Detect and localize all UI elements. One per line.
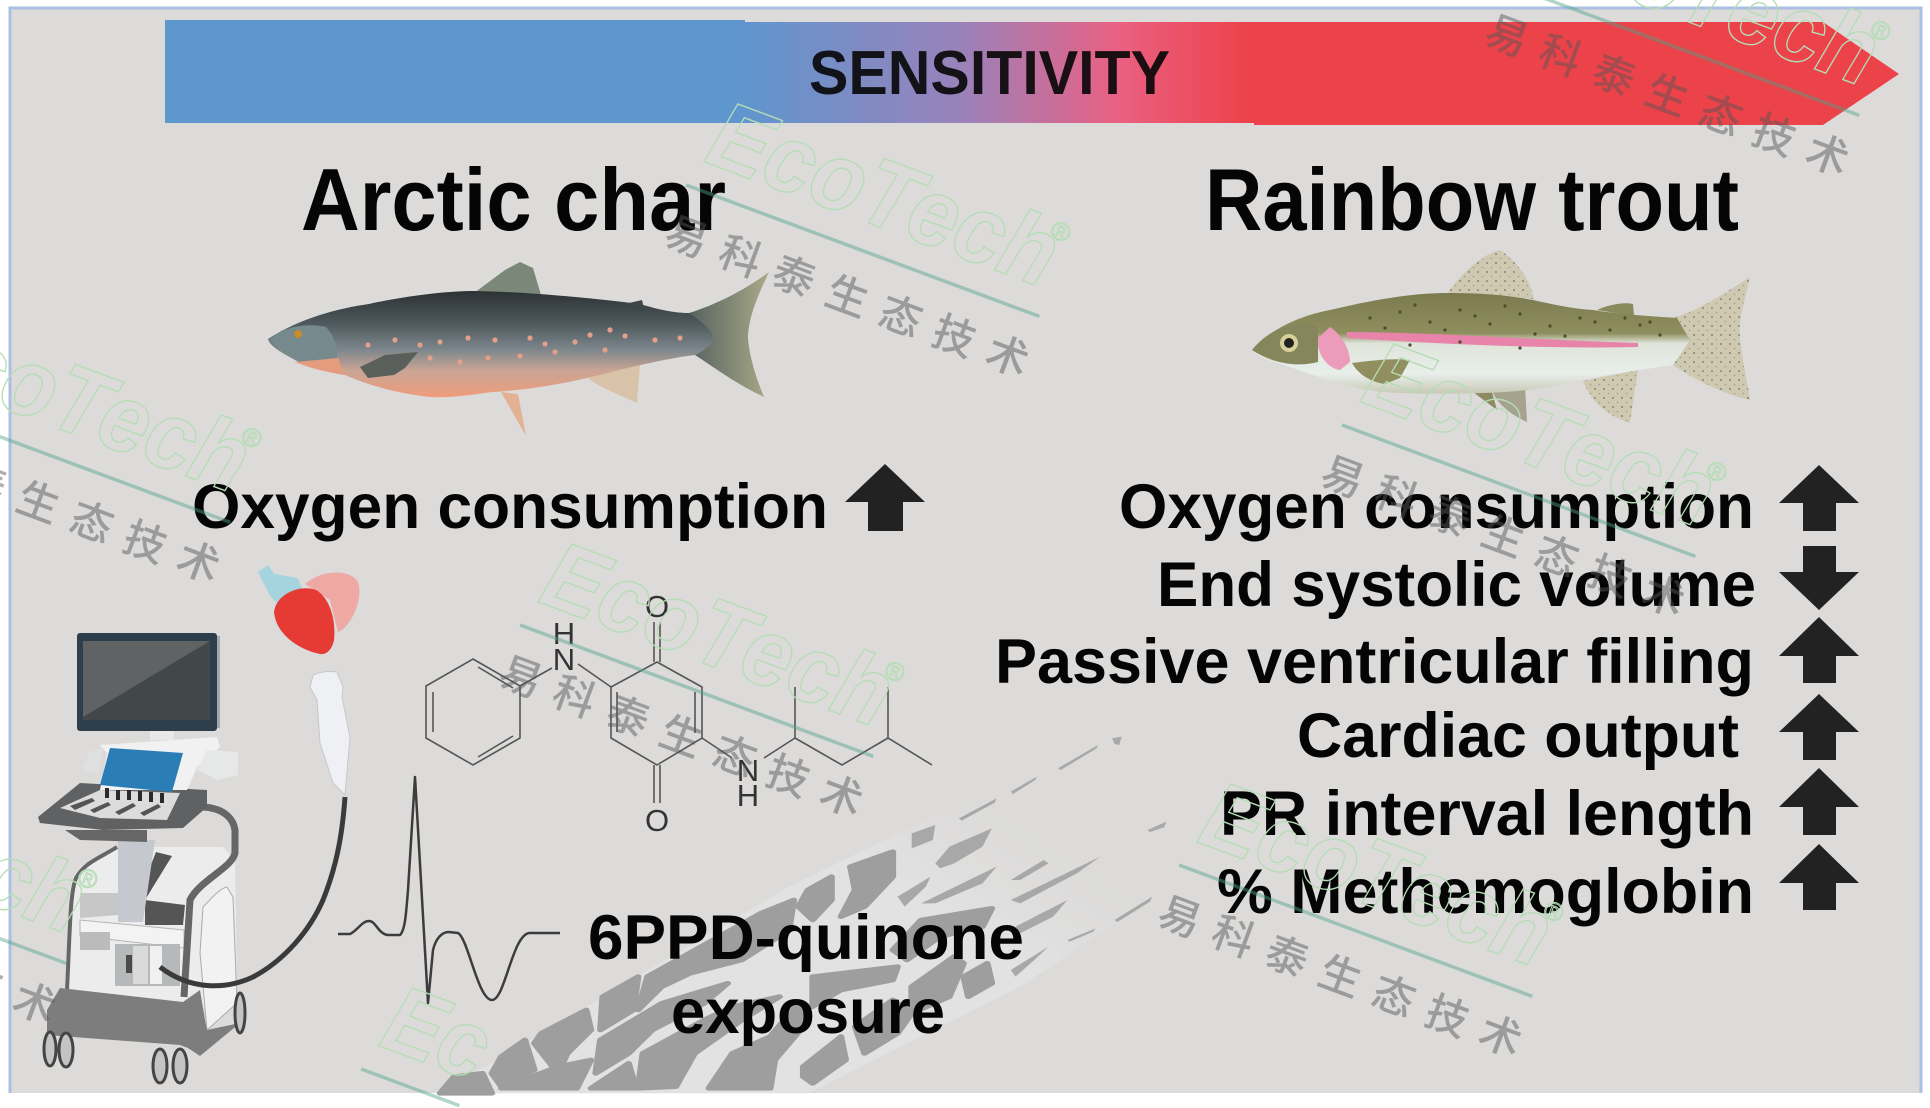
- atom labels: O: [645, 589, 669, 624]
- atom labels: N: [553, 642, 575, 677]
- label: 6PPD-quinone exposure: 6PPD-quinone: [588, 903, 1024, 973]
- front strip: [80, 920, 184, 948]
- watermark: top right: 易科泰生态技术: [1479, 7, 1869, 190]
- cart body: [65, 807, 237, 1030]
- watermark: right middle: 易科泰生态技术: [1315, 448, 1705, 631]
- watermark: center: ®: [881, 654, 909, 689]
- label: Oxygen consumption, Rainbow trout: Oxygen consumption: [1119, 472, 1754, 542]
- atom labels: O: [645, 803, 669, 838]
- arrow: up, trout oxygen consumption: [1779, 465, 1859, 531]
- watermark: right middle: EcoTech: [1351, 321, 1729, 548]
- watermark: center top: EcoTech: [695, 81, 1073, 308]
- icon: heart: [258, 565, 359, 654]
- arrow: up, passive ventricular filling: [1779, 617, 1859, 683]
- watermark: center top: [659, 77, 1098, 391]
- arrow: up, PR interval length: [1779, 768, 1859, 835]
- label: Oxygen consumption, Arctic char: Oxygen consumption: [192, 472, 828, 542]
- arrow: down, end systolic volume: [1779, 546, 1859, 610]
- chemical structure: 6PPD-quinone: [426, 589, 932, 838]
- atom labels: [553, 589, 759, 838]
- wheels: [44, 993, 245, 1083]
- watermark: lower right: EcoTech: [1188, 761, 1566, 988]
- watermark: left middle: ®: [238, 420, 266, 455]
- touch console: [82, 737, 238, 803]
- watermark: right middle: ®: [1703, 454, 1731, 489]
- heading: sensitivity: SENSITIVITY: [809, 39, 1170, 108]
- watermark: right middle: [1315, 317, 1754, 631]
- white side panel: [200, 887, 237, 1030]
- console knobs: [105, 788, 164, 803]
- watermark: center: 易科泰生态技术: [493, 648, 883, 831]
- icon: ultrasound machine: [38, 633, 245, 1083]
- label: Cardiac output: Cardiac output: [1297, 701, 1739, 771]
- atom labels: H: [737, 778, 759, 813]
- atom labels: N: [737, 753, 759, 788]
- atom labels: H: [553, 616, 575, 651]
- heading: Arctic char: Arctic char: [301, 150, 726, 249]
- module bay: [115, 944, 180, 986]
- chart: ECG trace: [338, 777, 560, 1003]
- watermark: center: EcoTech: [529, 521, 907, 748]
- label: 6PPD-quinone exposure: [588, 903, 1024, 1047]
- trout speckles: [1368, 303, 1662, 350]
- monitor: [77, 633, 220, 740]
- heading: Rainbow trout: Rainbow trout: [1205, 150, 1739, 249]
- watermark: center top: 易科泰生态技术: [659, 208, 1049, 391]
- label: Passive ventricular filling: Passive ventricular filling: [995, 627, 1754, 697]
- watermark: center top: ®: [1047, 214, 1075, 249]
- pedestal: [118, 840, 155, 922]
- icon: Arctic char fish: [268, 262, 769, 436]
- watermark: bottom center: Ec: [370, 965, 505, 1101]
- label: End systolic volume: End systolic volume: [1157, 550, 1756, 620]
- watermark: lower right: 易科泰生态技术: [1152, 888, 1542, 1071]
- thin fading tread streaks: [898, 737, 1166, 977]
- sensitivity gradient arrow: [165, 20, 1899, 125]
- icon: Rainbow trout fish: [1252, 250, 1750, 423]
- watermark: center: [493, 517, 932, 831]
- Arctic char spots: [365, 327, 683, 365]
- icon: ultrasound probe and cable: [160, 671, 350, 986]
- watermark: lower left: ®: [74, 861, 102, 896]
- rear compartment: [80, 893, 118, 918]
- watermark: top right: ®: [1867, 13, 1895, 48]
- arrow: up, methemoglobin: [1779, 844, 1859, 910]
- tread blocks: [440, 852, 992, 1093]
- label: PR interval length: PR interval length: [1220, 779, 1754, 849]
- label: 6PPD-quinone exposure: exposure: [671, 977, 945, 1047]
- keyboard: [38, 783, 207, 842]
- tire track: [440, 733, 1180, 1093]
- arrow: up, cardiac output: [1779, 694, 1859, 760]
- right frame and handle: [184, 807, 235, 997]
- watermark: lower right: [1152, 757, 1591, 1071]
- arrow: up, Arctic char oxygen consumption: [845, 464, 925, 531]
- watermark: lower right: ®: [1540, 894, 1568, 929]
- side vents: [80, 932, 110, 950]
- label: % Methemoglobin: % Methemoglobin: [1217, 857, 1754, 927]
- base: [47, 988, 240, 1056]
